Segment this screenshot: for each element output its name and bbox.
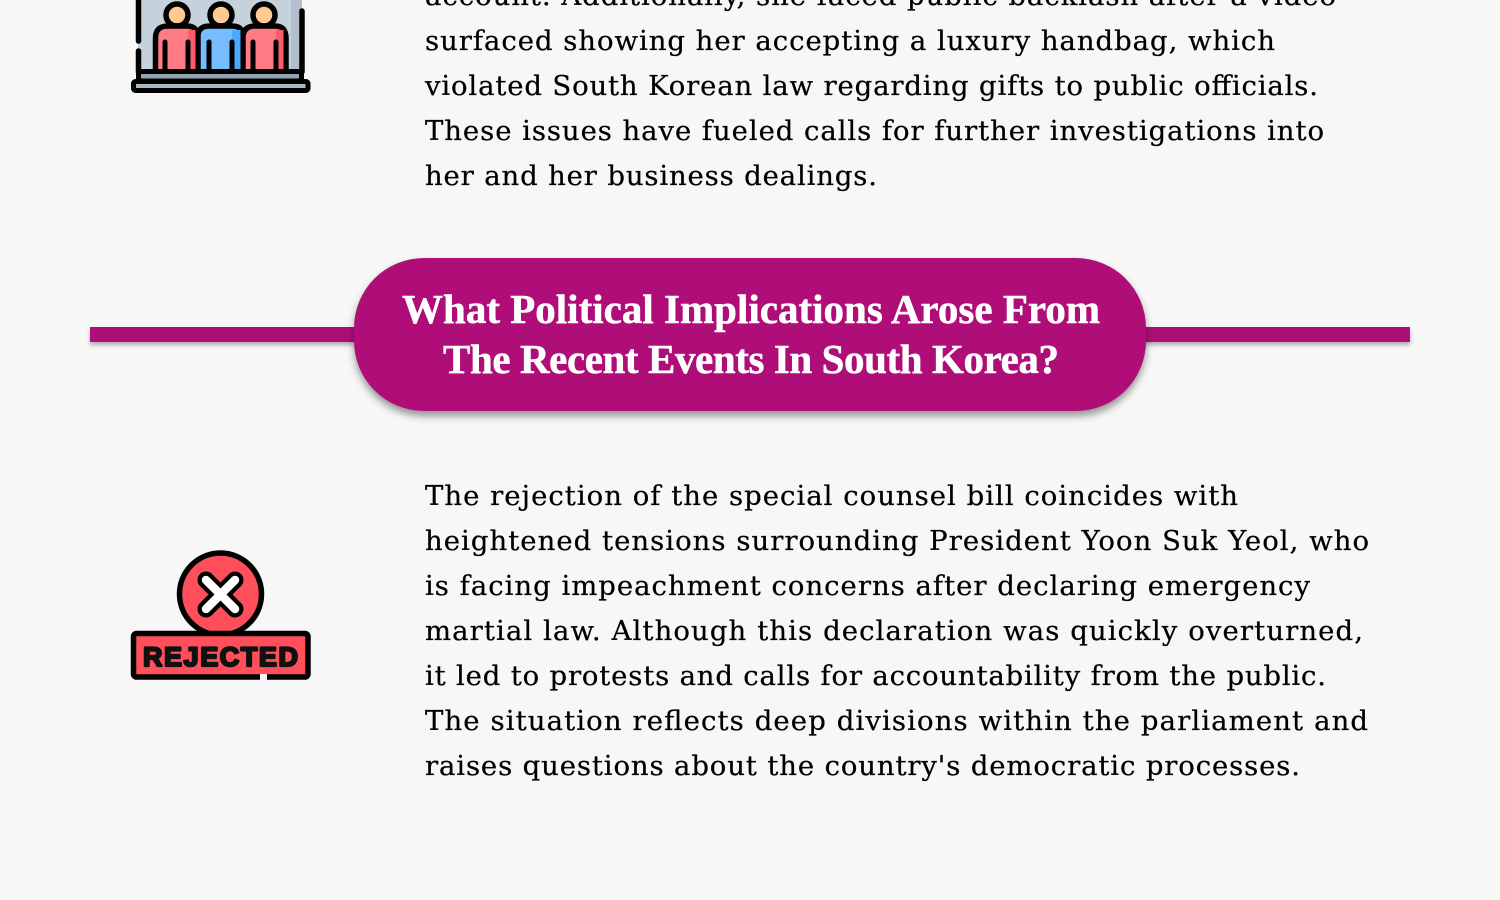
section divider bar — [90, 327, 1410, 342]
text block: background of the scandal: surfaced showing her accepting a luxury handbag, which — [425, 25, 1275, 57]
icon: seated panel of officials — [134, 0, 308, 90]
text block: background of the scandal: her and her business dealings. — [425, 160, 877, 192]
text block: political implications: The rejection of the special counsel bill coincides with — [425, 480, 1238, 512]
heading pill — [354, 258, 1146, 411]
text block: political implications: is facing impeachment concerns after declaring emergency — [425, 570, 1310, 602]
heading text — [402, 286, 1100, 382]
icon: rejected stamp: REJECTED — [143, 642, 298, 672]
text block: background of the scandal: violated South Korean law regarding gifts to public officials. — [424, 70, 1318, 102]
text block: political implications: The situation reflects deep divisions within the parliament and — [425, 705, 1368, 737]
icon: rejected stamp — [134, 553, 308, 680]
text block: background of the scandal — [424, 0, 1336, 192]
text block: background of the scandal: These issues have fueled calls for further investigations into — [425, 115, 1324, 147]
text block: political implications: raises questions about the country's democratic processes. — [425, 750, 1300, 782]
heading text: What Political Implications Arose From — [402, 286, 1100, 332]
text block: political implications: martial law. Although this declaration was quickly overturned, — [425, 615, 1363, 647]
heading text: The Recent Events In South Korea? — [443, 336, 1059, 382]
text block: political implications — [425, 480, 1369, 782]
text block: political implications: heightened tensions surrounding President Yoon Suk Yeol, who — [425, 525, 1369, 557]
text block: political implications: it led to protests and calls for accountability from the public. — [425, 660, 1326, 692]
